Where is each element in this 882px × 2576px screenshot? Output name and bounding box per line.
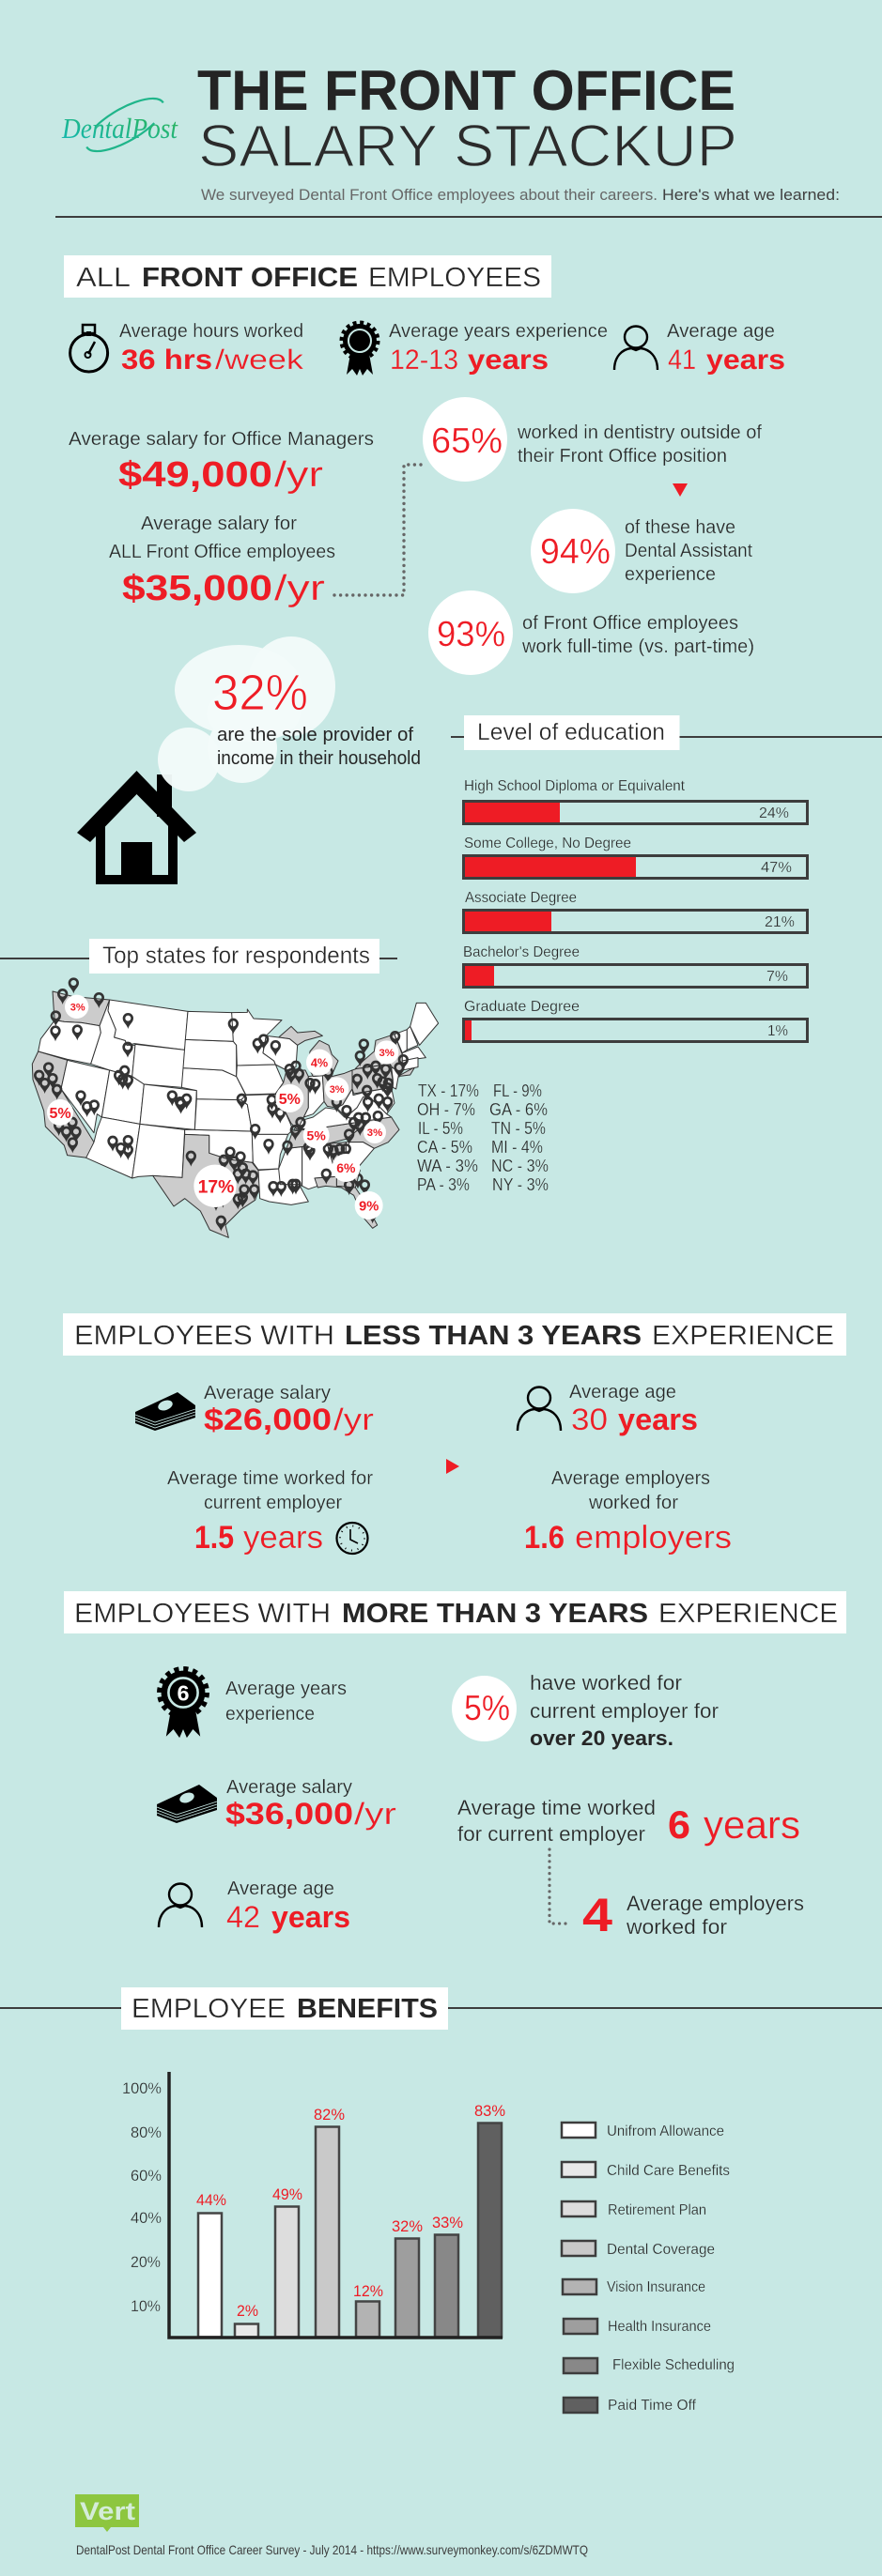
legend: benefits [562,2123,735,2414]
map percent badges: 5% [279,1092,301,1108]
salary: all employees: /yr [274,569,325,608]
stat: average years experience: Average years experience [389,321,608,342]
panel heading: less than 3 years [63,1313,846,1356]
panel heading: employee benefits: EMPLOYEE [132,1994,286,2024]
icon: ribbon with 6 [160,1669,207,1738]
panel heading: all front office employees [64,255,551,298]
salary: office managers [69,428,374,495]
bar: graduate 1% [464,999,808,1042]
stat: employers under 3 years: worked for [588,1493,678,1513]
stat: time with employer under 3 years: years [243,1520,323,1556]
stat: employers under 3 years [524,1468,732,1556]
map percent badges: 5% [49,1106,71,1122]
stat: employers under 3 years: employers [575,1520,732,1556]
icon: person [614,327,658,370]
heading: level of education [464,715,680,750]
logo: Vert: Vert [80,2497,135,2525]
callout: 94%: 94% [540,532,611,572]
callout: 93%: of Front Office employees [522,613,738,634]
bar: associate 21%: 21% [765,914,795,930]
bar value labels: 44% [196,2192,226,2209]
panel heading: employee benefits: BENEFITS [297,1994,438,2024]
dotted connector [549,1849,566,1924]
stat: average age under 3 years: Average age [569,1382,676,1403]
y axis labels: 20% [131,2254,161,2271]
stat: average age under 3 years [518,1382,698,1436]
stat: employers over 3 years [582,1889,804,1941]
dotted connector [334,465,422,595]
bar: graduate 1%: 1% [767,1023,788,1039]
bar value labels: 33% [432,2215,463,2231]
panel heading: more than 3 years: MORE THAN 3 YEARS [342,1599,648,1629]
icon: stopwatch [70,325,108,372]
callout: 93% [428,590,754,675]
stat: average salary under 3 years: /yr [333,1403,374,1436]
chart: education bars [463,778,808,1042]
legend: benefits: Child Care Benefits [607,2163,730,2179]
subtitle: Here's what we learned: [662,186,840,204]
stat: time with employer under 3 years [167,1468,373,1556]
logo: Vert [75,2494,139,2532]
bar value labels: 32% [392,2218,423,2235]
legend: top states list: NY - 3% [492,1175,549,1194]
callout: 94%: Dental Assistant [625,541,752,561]
y axis labels: 10% [131,2298,161,2315]
map percent badges: 6% [336,1160,356,1175]
map percent badges: 9% [359,1199,379,1214]
panel heading: employee benefits [121,1987,448,2030]
heading: top states: Top states for respondents [102,943,370,969]
legend: top states list: WA - 3% [417,1157,478,1175]
bar: bachelor 7%: Bachelor's Degree [463,944,580,960]
stat: average years experience over 3 years [160,1669,347,1738]
map percent badges: 3% [367,1127,382,1139]
salary: office managers: $49,000 [118,455,272,495]
axes [169,2072,503,2338]
panel heading: less than 3 years: EMPLOYEES WITH [74,1321,334,1351]
callout: 5%: have worked for [530,1671,682,1694]
bar value labels: 82% [314,2107,345,2124]
stat: employers over 3 years: 4 [582,1889,612,1941]
salary: all employees: ALL Front Office employees [109,541,335,562]
stat: time with employer under 3 years: current employer [204,1493,342,1513]
stat: average age over 3 years: years [271,1900,350,1934]
panel heading: all front office employees: ALL [76,263,131,293]
legend: top states list: MI - 4% [491,1138,543,1157]
callout: 65%: 65% [431,422,503,461]
bar: bachelor 7% [463,944,808,988]
bars [198,2124,502,2338]
stat: average years experience: 12-13 [390,345,458,376]
callout: 65%: their Front Office position [518,446,727,467]
bar: associate 21% [464,890,808,933]
stat: employers under 3 years: 1.6 [524,1520,565,1556]
stat: average years experience over 3 years: Average years [225,1679,347,1699]
icon: ribbon award [342,323,378,376]
map percent badges [47,995,398,1219]
bar: graduate 1%: Graduate Degree [464,999,580,1015]
salary: all employees: Average salary for [141,513,297,534]
stat: average age: Average age [667,321,775,342]
map percent badges: 17% [198,1177,234,1197]
stat: time with employer over 3 years: for current employer [457,1822,645,1846]
legend: benefits: Health Insurance [608,2319,711,2335]
map percent badges: 4% [311,1056,328,1069]
callout: 94%: experience [625,564,716,585]
callout: 5%: current employer for [530,1699,719,1723]
arrow: right [446,1459,459,1474]
panel heading: all front office employees: FRONT OFFICE [142,263,358,293]
panel heading: more than 3 years: EXPERIENCE [658,1599,838,1629]
stat: average salary under 3 years [135,1383,374,1436]
title: SALARY STACKUP [198,114,737,179]
callout: 65%: worked in dentistry outside of [517,422,762,443]
stat: average years experience: years [468,345,549,376]
stat: time with employer over 3 years: years [704,1802,800,1847]
logo: DentalPost [61,88,178,161]
stat: average years experience [342,321,608,376]
bar: associate 21%: Associate Degree [465,890,577,906]
callout: smoke cloud 32%: 32% [212,665,308,721]
stat: average hours [70,321,304,376]
callout: smoke cloud 32%: are the sole provider of [217,725,413,745]
y axis labels: 100% [122,2080,162,2097]
map: United States with respondent pins [32,977,439,1237]
icon: money stack [135,1392,195,1431]
stat: average hours: 36 hrs [121,345,212,376]
y axis labels: 40% [131,2210,162,2227]
stat: average age over 3 years: 42 [226,1900,260,1934]
callout: 94% [531,509,752,593]
bar: high school 24%: High School Diploma or Equivalent [464,778,686,794]
legend: benefits: Unifrom Allowance [607,2124,724,2139]
stat: average salary over 3 years: /yr [354,1797,396,1831]
bar: high school 24%: 24% [759,805,789,821]
panel heading: less than 3 years: LESS THAN 3 YEARS [345,1321,642,1351]
callout: smoke cloud 32% [158,636,421,791]
stat: average age over 3 years: Average age [227,1878,334,1899]
stat: employers over 3 years: worked for [626,1915,727,1939]
stat: average salary under 3 years: $26,000 [204,1403,332,1436]
legend: benefits: Dental Coverage [607,2242,715,2258]
stat: average hours: /week [215,345,304,376]
map percent badges: 3% [379,1048,395,1059]
stat: average salary over 3 years: $36,000 [225,1797,353,1831]
legend: top states list: TN - 5% [491,1119,546,1138]
stat: average age: years [706,345,785,376]
panel heading: more than 3 years: EMPLOYEES WITH [74,1599,331,1629]
map percent badges: 3% [330,1084,345,1096]
arrow: down [673,483,688,497]
y axis labels [122,2080,162,2315]
salary: office managers: /yr [274,455,323,495]
legend: top states list: NC - 3% [491,1157,549,1175]
map percent badges: 3% [70,1002,85,1013]
stat: average salary over 3 years: Average salary [226,1777,352,1798]
y axis labels: 60% [131,2168,162,2185]
salary: office managers: Average salary for Office Managers [69,428,374,450]
callout: 93%: 93% [437,615,505,654]
bar value labels [196,2103,505,2320]
bar chart: employee benefits [122,2072,505,2338]
title: THE FRONT OFFICE [197,59,735,122]
legend: benefits: Retirement Plan [608,2202,706,2218]
stat: time with employer over 3 years [457,1796,800,1847]
stat: average age under 3 years: years [618,1403,698,1436]
stat: employers under 3 years: Average employers [551,1468,710,1489]
legend: benefits: Vision Insurance [607,2279,705,2295]
stat: average salary over 3 years [157,1777,396,1831]
stat: time with employer under 3 years: 1.5 [194,1520,234,1556]
logo: DentalPost: DentalPost [61,112,178,145]
panel heading: more than 3 years [64,1591,846,1633]
callout: 94%: of these have [625,517,735,538]
salary: all employees: $35,000 [122,569,272,608]
callout: 5% [452,1671,719,1750]
panel heading: all front office employees: EMPLOYEES [368,263,541,293]
bar: some college 47%: 47% [761,860,792,876]
bar value labels: 83% [474,2103,505,2120]
callout: 93%: work full-time (vs. part-time) [521,636,754,657]
bar value labels: 2% [237,2303,258,2320]
legend: top states list: FL - 9% [493,1081,542,1100]
stat: average age over 3 years [159,1878,350,1934]
bar: some college 47% [464,836,808,879]
legend: top states list [417,1081,549,1194]
bar: bachelor 7%: 7% [766,969,788,985]
bar: high school 24% [464,778,808,824]
panel heading: less than 3 years: EXPERIENCE [652,1321,834,1351]
stat: average age: 41 [668,345,696,376]
bar: some college 47%: Some College, No Degree [464,836,631,851]
map percent badges: 5% [307,1128,326,1143]
stat: employers over 3 years: Average employers [627,1892,804,1915]
title [197,59,737,179]
legend: benefits: Flexible Scheduling [612,2357,735,2373]
map pins [34,977,409,1232]
stat: average hours: Average hours worked [119,321,303,342]
stat: time with employer over 3 years: 6 [668,1802,690,1847]
icon: clock [336,1523,368,1554]
stat: average age under 3 years: 30 [571,1403,608,1436]
callout: smoke cloud 32%: income in their household [217,748,421,769]
callout: 65% [423,397,762,482]
bar value labels: 49% [272,2186,302,2203]
heading: level of education: Level of education [477,719,665,745]
footer source: DentalPost Dental Front Office Career Survey - July 2014 - https://www.surveymonkey.com/s/6ZDMWTQ [76,2542,588,2557]
stat: average age [614,321,785,376]
stat: time with employer under 3 years: Average time worked for [167,1468,373,1489]
legend: top states list: IL - 5% [418,1119,463,1138]
bar value labels: 12% [353,2283,383,2300]
legend: top states list: OH - 7% [417,1100,475,1119]
icon: house [77,771,196,884]
salary: all employees [109,513,335,608]
legend: top states list: GA - 6% [489,1100,548,1119]
y axis labels: 80% [131,2124,162,2141]
icon: person [518,1388,561,1431]
stat: time with employer over 3 years: Average time worked [457,1796,656,1819]
subtitle: We surveyed Dental Front Office employees about their careers. [201,186,658,204]
legend: top states list: TX - 17% [418,1081,479,1100]
stat: average salary under 3 years: Average salary [204,1383,331,1403]
icon: ribbon with 6: 6 [177,1680,190,1705]
legend: top states list: PA - 3% [417,1175,470,1194]
icon: person [159,1883,202,1927]
icon: money stack [157,1785,217,1823]
legend: benefits: Paid Time Off [608,2398,697,2414]
stat: average years experience over 3 years: experience [225,1704,315,1725]
callout: 5%: 5% [464,1689,510,1728]
callout: 5%: over 20 years. [530,1726,673,1750]
legend: top states list: CA - 5% [417,1138,472,1157]
